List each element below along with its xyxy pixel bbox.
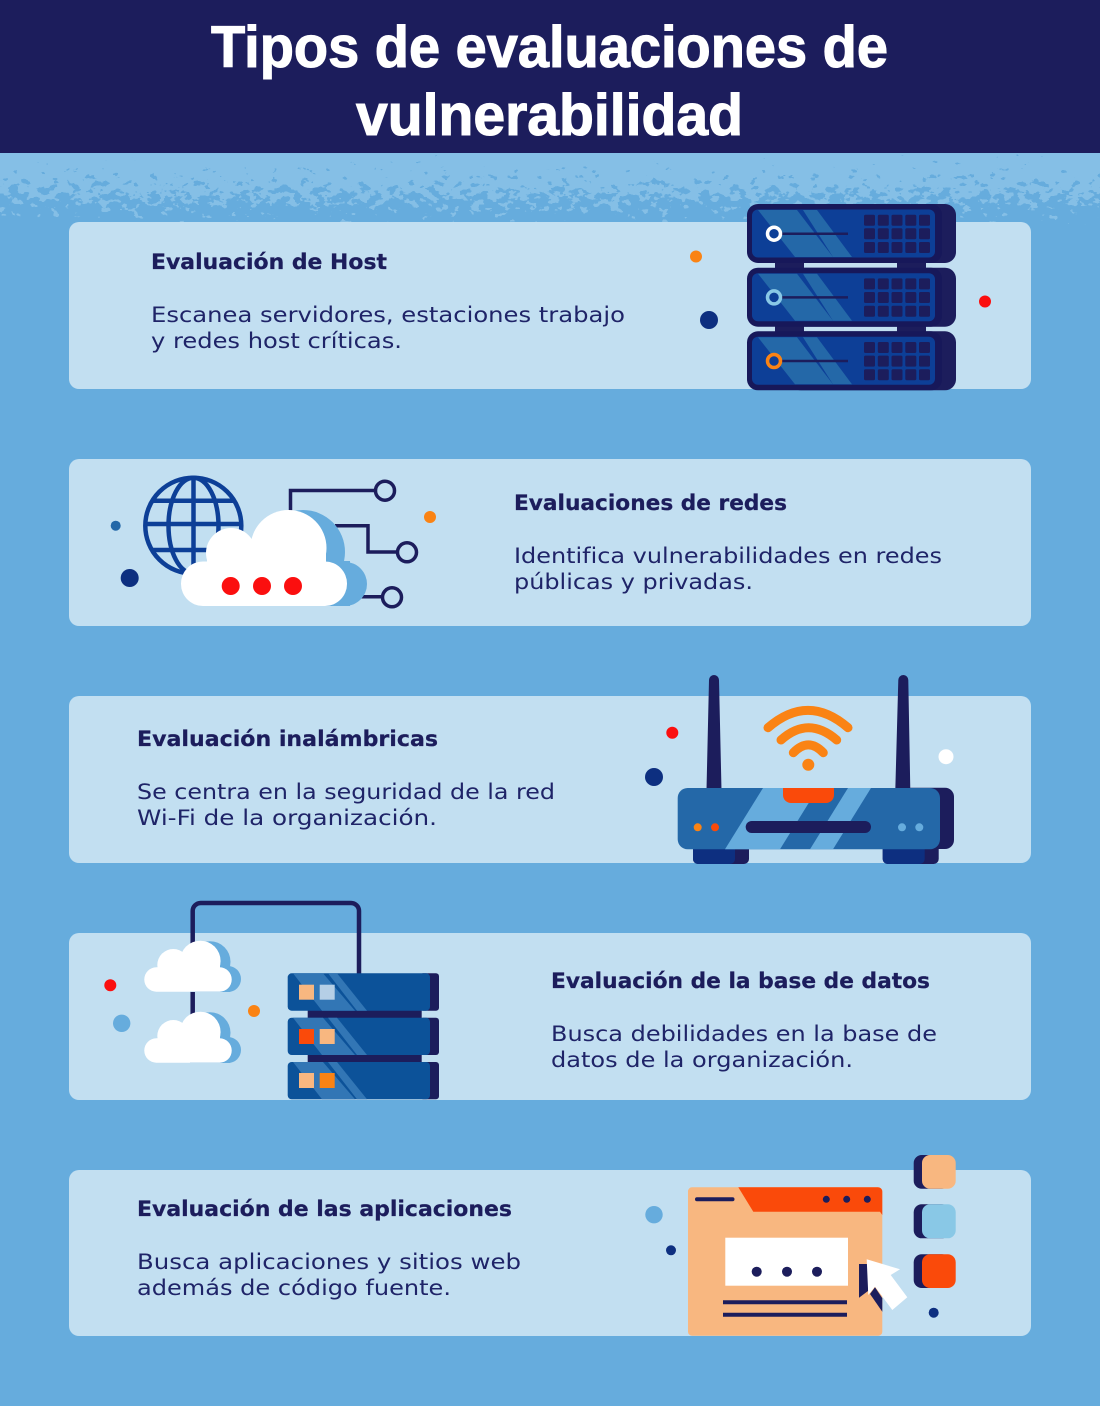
decorative dots: host xyxy=(690,250,991,329)
router body xyxy=(678,788,954,849)
icon: globe xyxy=(145,477,242,574)
grain texture band xyxy=(0,153,1100,225)
text block: base de datos xyxy=(551,1022,937,1073)
title xyxy=(211,15,888,148)
router feet xyxy=(693,840,939,864)
text block: aplicaciones: además de código fuente. xyxy=(137,1276,451,1301)
decorative dots: aplicaciones xyxy=(645,1206,939,1318)
heading: redes: Evaluaciones de redes xyxy=(514,491,787,515)
icon: browser window xyxy=(688,1187,882,1336)
icon: network wire xyxy=(193,903,359,1015)
icon: colour swatches xyxy=(914,1155,956,1288)
panel: evaluación de la base de datos xyxy=(69,903,1031,1100)
text block: redes xyxy=(514,544,942,595)
header banner xyxy=(0,0,1100,153)
text block: base de datos: Busca debilidades en la base de xyxy=(551,1022,937,1047)
text block: host xyxy=(151,303,625,354)
heading: base de datos: Evaluación de la base de datos xyxy=(551,969,930,993)
router antennas xyxy=(706,675,910,790)
heading: host: Evaluación de Host xyxy=(151,250,387,274)
panel: evaluación de host xyxy=(69,204,1031,390)
heading: inalámbricas: Evaluación inalámbricas xyxy=(137,727,438,751)
icon: cursor xyxy=(859,1259,907,1312)
text block: host: Escanea servidores, estaciones trabajo xyxy=(151,303,625,328)
title: vulnerabilidad xyxy=(356,83,743,148)
text block: base de datos: datos de la organización. xyxy=(551,1048,853,1073)
text block: redes: Identifica vulnerabilidades en redes xyxy=(514,544,942,569)
icon: database servers xyxy=(288,973,439,1099)
heading: aplicaciones: Evaluación de las aplicaciones xyxy=(137,1197,512,1221)
decorative dots: redes xyxy=(111,511,436,587)
title: Tipos de evaluaciones de xyxy=(211,15,888,80)
icon: cloud xyxy=(181,510,367,606)
icon: wifi router xyxy=(678,675,954,864)
icon: clouds xyxy=(144,941,241,1063)
text block: inalámbricas: Wi-Fi de la organización. xyxy=(137,806,437,831)
text block: redes: públicas y privadas. xyxy=(514,570,753,595)
decorative dots: base de datos xyxy=(104,979,260,1032)
text block: inalámbricas xyxy=(137,780,555,831)
wifi signal xyxy=(768,710,848,771)
decorative dots: inalámbricas xyxy=(645,727,954,786)
panel: evaluación inalámbricas xyxy=(69,675,1031,864)
panel: evaluación de las aplicaciones xyxy=(69,1155,1031,1336)
text block: aplicaciones: Busca aplicaciones y sitios web xyxy=(137,1250,521,1275)
text block: aplicaciones xyxy=(137,1250,521,1301)
text block: inalámbricas: Se centra en la seguridad de la red xyxy=(137,780,555,805)
text block: host: y redes host críticas. xyxy=(151,329,402,354)
icon: circuit lines xyxy=(290,481,416,607)
icon: server rack xyxy=(747,204,956,390)
panel: evaluaciones de redes xyxy=(69,459,1031,626)
